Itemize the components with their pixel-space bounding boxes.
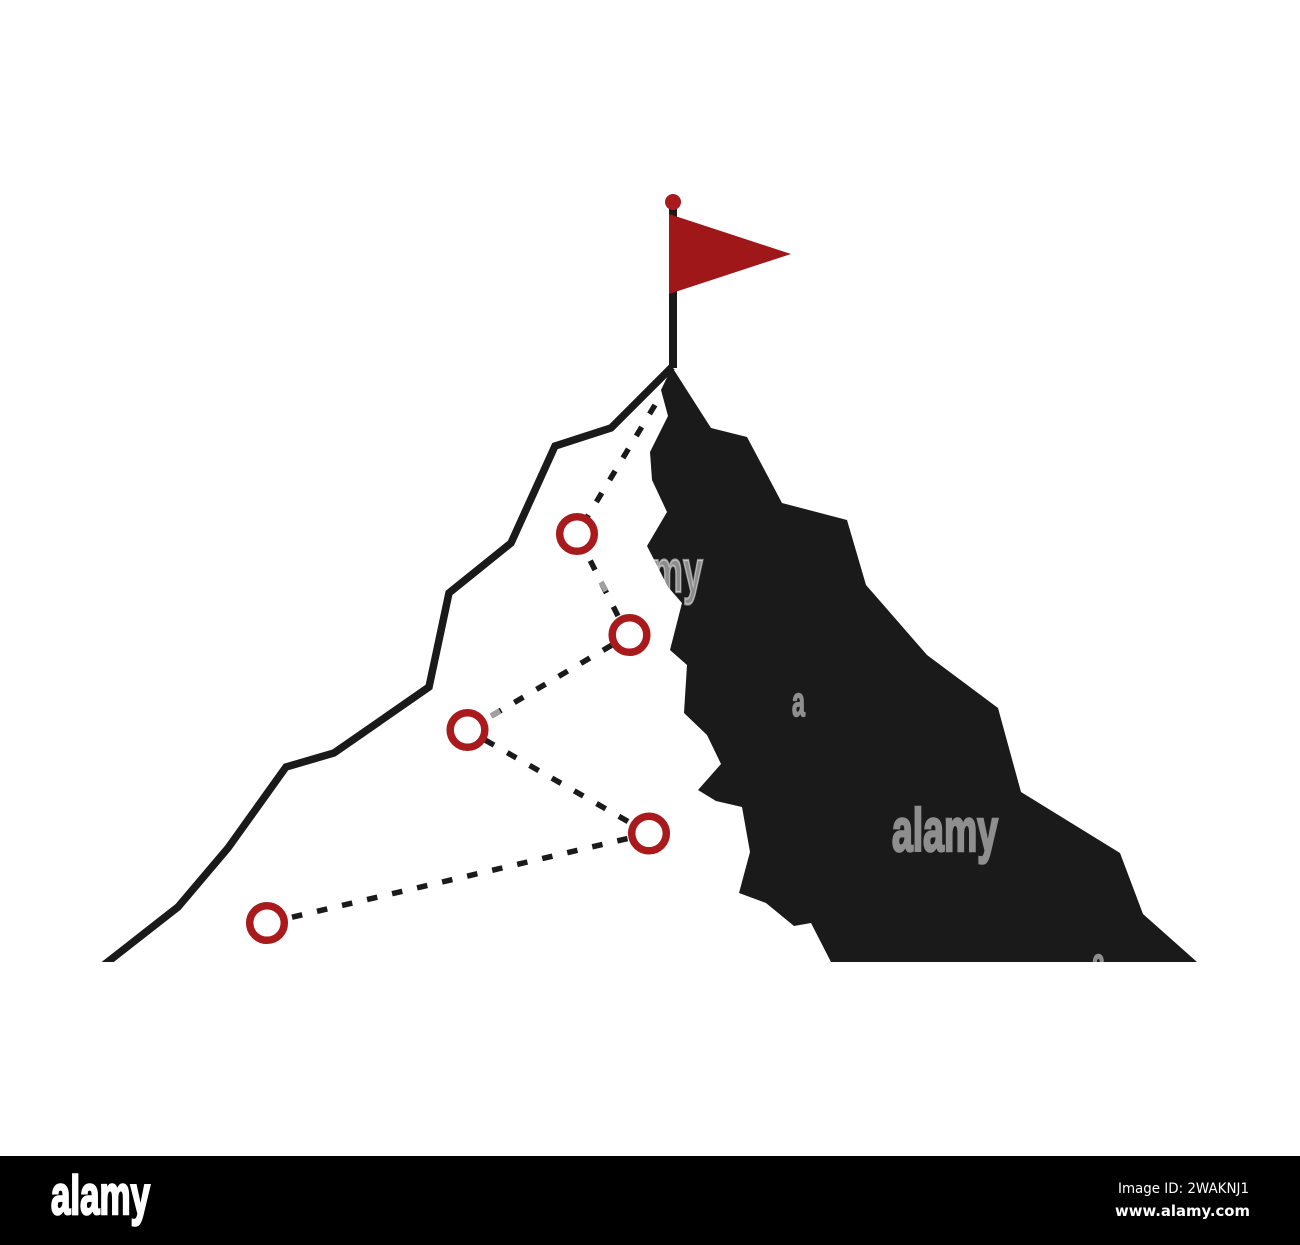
dashed climbing route — [292, 405, 655, 917]
flag pole — [669, 205, 677, 368]
watermark-faded route dashes — [491, 582, 606, 716]
waypoint 1 — [250, 906, 284, 940]
waypoint 5 — [560, 517, 594, 551]
watermark: my, over rock only: my — [651, 538, 703, 605]
waypoint 4 — [612, 618, 647, 652]
waypoint 3 — [450, 713, 485, 747]
footer logo: alamy — [51, 1164, 150, 1226]
waypoint 2 — [632, 816, 666, 851]
watermark: alamy: alamy — [892, 797, 998, 864]
red flag — [669, 214, 791, 294]
route waypoints — [250, 517, 666, 940]
website: www.alamy.com — [1115, 1202, 1250, 1220]
footer bar — [0, 1156, 1300, 1245]
watermark: a: a — [792, 678, 805, 725]
mountain shadow side — [647, 367, 1197, 962]
watermark: clipped a: a — [1092, 939, 1105, 986]
image id: Image ID: 2WAKNJ1 — [1118, 1181, 1249, 1197]
mountain outline: lit left ridge — [100, 367, 672, 968]
flag pole ball — [665, 194, 681, 210]
